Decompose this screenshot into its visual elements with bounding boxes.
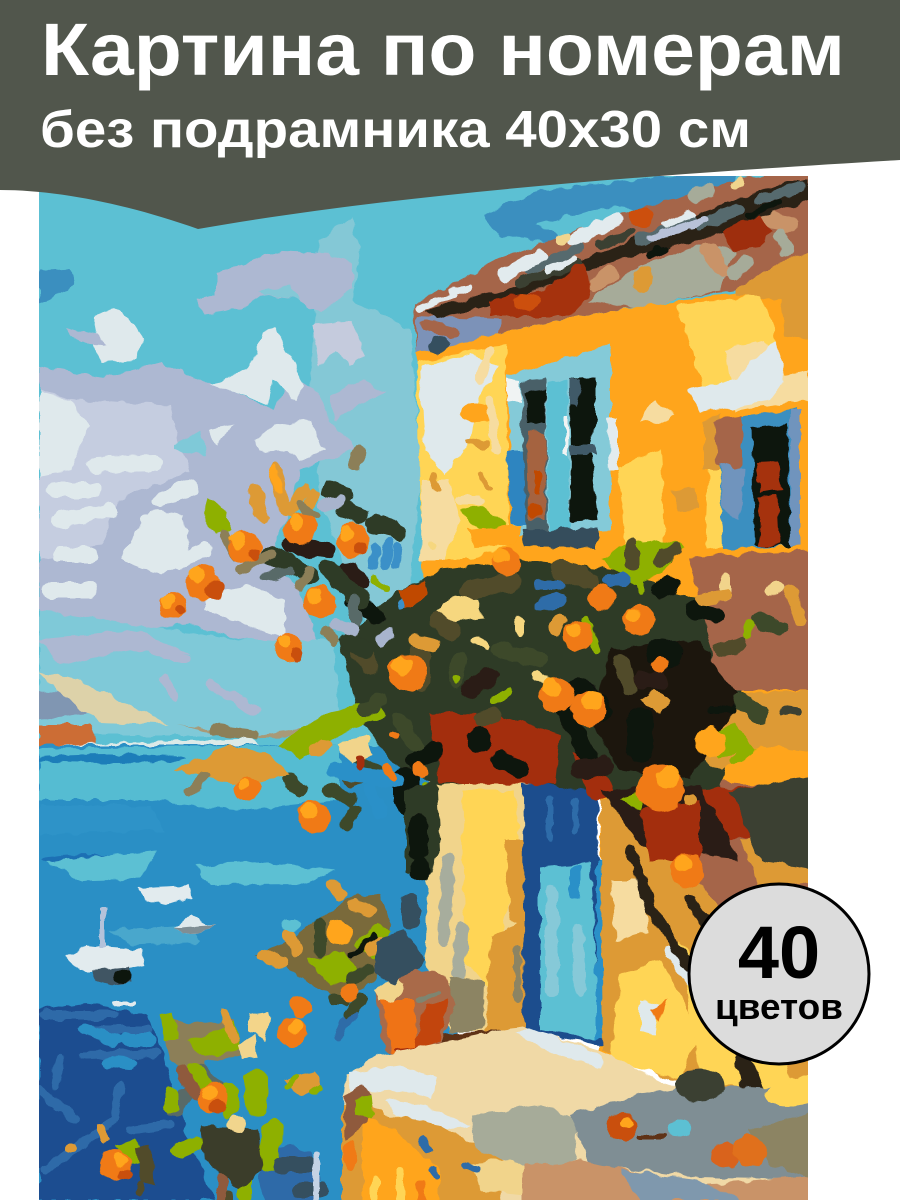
- badge: 40 colours: [689, 884, 869, 1064]
- badge: 40 colours: 40: [738, 911, 820, 994]
- header banner: [0, 0, 900, 229]
- window left: [507, 345, 618, 548]
- foliage on house: [203, 497, 820, 960]
- painting: [20, 150, 830, 1200]
- awning: [688, 340, 785, 413]
- door: [523, 780, 604, 1045]
- sea: [20, 745, 460, 1200]
- door wall: [425, 775, 530, 1056]
- badge: 40 colours: цветов: [715, 986, 843, 1027]
- boats: [66, 885, 214, 1003]
- subtitle: без подрамника 40х30 см: [40, 101, 751, 159]
- window right: [715, 409, 800, 550]
- wall right of door: [598, 779, 808, 1090]
- roof: [413, 170, 820, 355]
- left orange branch: [175, 450, 415, 825]
- distant shore: [39, 725, 260, 752]
- pot: [375, 967, 455, 1058]
- sky: [39, 176, 764, 747]
- terrace: [342, 1027, 820, 1200]
- building wall: [417, 240, 820, 1060]
- orange fruits: [99, 513, 766, 1181]
- lower left bush: [70, 1012, 322, 1200]
- mid bush: [254, 885, 425, 1038]
- title: Картина по номерам: [41, 8, 845, 91]
